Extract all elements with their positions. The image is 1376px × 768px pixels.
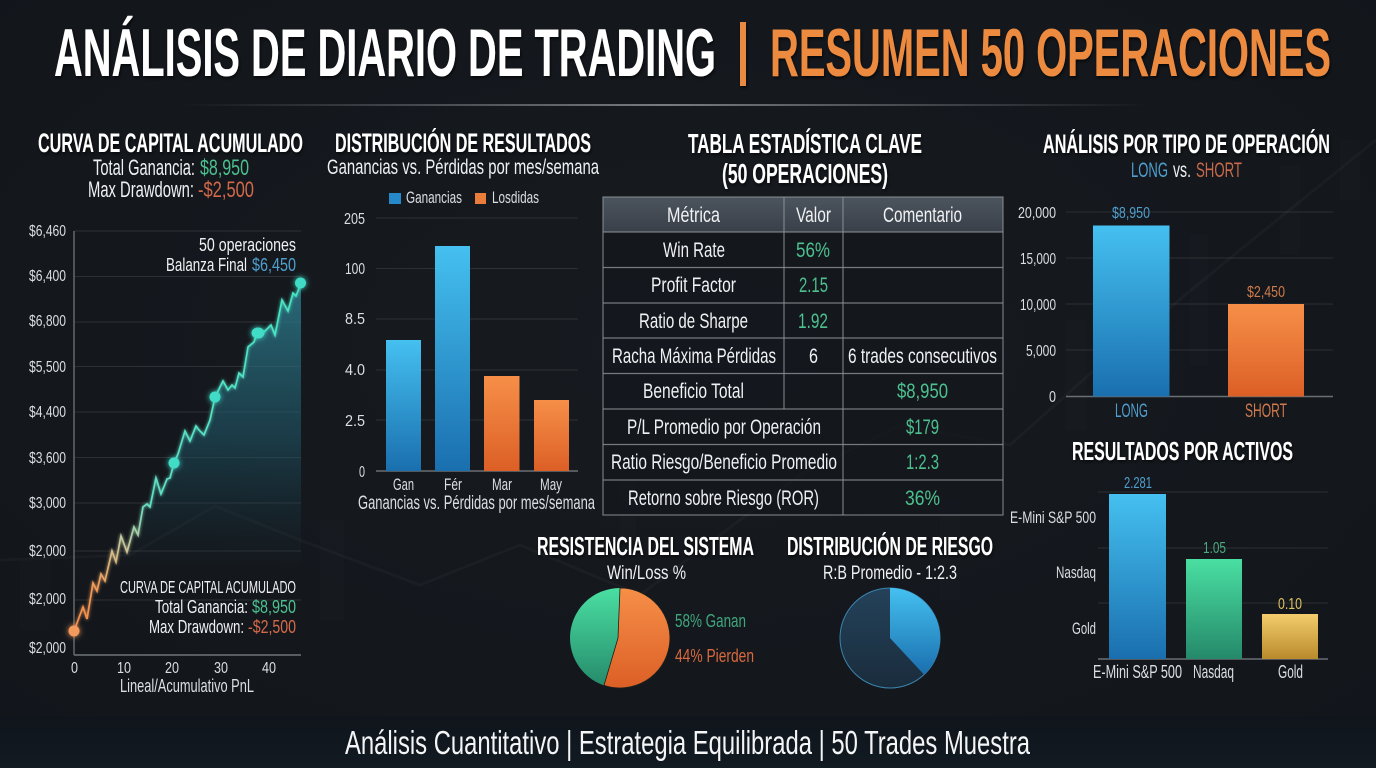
bar chart: gains vs losses: May (540, 476, 563, 494)
panel: statistics table (603, 128, 1003, 515)
pie labels: 44% Pierden (675, 646, 754, 666)
table: Beneficio Total (643, 379, 744, 403)
legend: Losdidas (492, 189, 539, 207)
x axis labels: 10 (117, 660, 131, 677)
bar chart: assets: 2.281 (1124, 475, 1152, 492)
table: 36% (905, 486, 940, 510)
callout: final balance: 50 operaciones (199, 235, 296, 255)
bar chart: long vs short: 0 (1049, 389, 1056, 406)
callout: chart summary (120, 577, 296, 637)
subheading: win loss: Win/Loss % (607, 563, 686, 584)
bar chart: long vs short: SHORT (1245, 401, 1287, 422)
x axis labels: 40 (262, 660, 276, 677)
x axis labels: 0 (71, 660, 78, 677)
y axis labels: $4,400 (29, 404, 66, 421)
bar chart: long vs short: LONG (1115, 401, 1148, 422)
table: Ratio Riesgo/Beneficio Promedio (611, 450, 837, 474)
table: Ratio de Sharpe (639, 309, 748, 333)
bar chart: long vs short: 10,000 (1020, 297, 1056, 314)
bar chart: assets: Gold (1072, 619, 1096, 638)
pie chart: risk (840, 588, 940, 688)
bar chart: gains vs losses: 205 (344, 211, 365, 228)
capital curve summary: -$2,500 (198, 177, 254, 202)
subheading: results distribution: Ganancias vs. Pérdidas por mes/semana (327, 156, 599, 179)
callout: chart summary: $8,950 (252, 597, 296, 617)
bar chart: assets: Nasdaq (1056, 563, 1096, 582)
heading: results distribution: DISTRIBUCIÓN DE RESULTADOS (335, 127, 591, 158)
x axis labels: 20 (165, 660, 179, 677)
callout: chart summary: Total Ganancia: (155, 597, 248, 617)
capital curve summary (88, 155, 254, 202)
panel: asset results (1010, 436, 1328, 682)
y axis labels: $6,400 (29, 268, 66, 285)
y axis labels: $6,460 (29, 223, 66, 240)
table: 1.92 (798, 309, 828, 333)
table: P/L Promedio por Operación (627, 415, 821, 439)
table: $8,950 (897, 379, 948, 403)
bar chart: long vs short (1018, 205, 1333, 422)
bar chart: gains vs losses: Fér (444, 476, 462, 494)
table: Comentario (883, 203, 962, 227)
bar chart: assets: E-Mini S&P 500 (1093, 662, 1182, 682)
pie labels (675, 611, 754, 666)
bar chart: gains vs losses: Gan (393, 476, 414, 494)
callout: chart summary: CURVA DE CAPITAL ACUMULADO (120, 577, 296, 597)
subheading: risk ratio: R:B Promedio - 1:2.3 (823, 563, 957, 584)
line chart: capital curve (29, 223, 306, 696)
bar chart: assets (1010, 475, 1328, 682)
heading: statistics table (688, 128, 922, 189)
footer (0, 716, 1376, 768)
table: $179 (906, 415, 939, 439)
panel: results distribution (327, 127, 599, 514)
subheading: long vs short: LONG (1131, 159, 1168, 182)
bar chart: long vs short: 15,000 (1020, 251, 1056, 268)
x axis labels: Lineal/Acumulativo PnL (120, 676, 254, 696)
x axis labels: 30 (214, 660, 228, 677)
panel: risk distribution (787, 531, 993, 688)
bar chart: long vs short: 20,000 (1018, 205, 1056, 222)
heading: capital curve: CURVA DE CAPITAL ACUMULADO (38, 128, 303, 158)
footer: Análisis Cuantitativo | Estrategia Equilibrada | 50 Trades Muestra (345, 724, 1030, 761)
bar chart: long vs short: $2,450 (1247, 284, 1285, 301)
callout: final balance: $6,450 (252, 255, 296, 275)
pie labels: 58% Ganan (675, 611, 746, 631)
bar chart: gains vs losses: 100 (345, 261, 365, 278)
y axis labels: $2,000 (29, 591, 66, 608)
capital curve summary: $8,950 (200, 155, 249, 180)
panel: capital curve (29, 128, 306, 696)
y axis labels: $2,000 (29, 543, 66, 560)
bar chart: gains vs losses: Ganancias vs. Pérdidas por mes/semana (358, 493, 595, 514)
bar chart: long vs short: 5,000 (1026, 343, 1056, 360)
y axis labels: $3,600 (29, 450, 66, 467)
panel: long vs short (1018, 128, 1333, 422)
heading: statistics table: TABLA ESTADÍSTICA CLAVE (688, 128, 922, 159)
x axis labels (71, 660, 276, 696)
subheading: long vs short: vs. (1173, 159, 1191, 182)
legend: Ganancias (406, 189, 462, 207)
table: Métrica (667, 203, 720, 227)
y axis labels: $6,800 (29, 313, 66, 330)
table: Retorno sobre Riesgo (ROR) (628, 486, 819, 510)
table: Win Rate (663, 238, 725, 262)
bar chart: gains vs losses: 8.5 (345, 311, 365, 328)
y axis labels: $5,500 (29, 359, 66, 376)
heading: statistics table: (50 OPERACIONES) (722, 158, 888, 189)
capital curve summary: Total Ganancia: (93, 155, 195, 180)
subheading: long vs short (1131, 159, 1242, 182)
bar chart: gains vs losses: 2.5 (345, 413, 365, 430)
table: Racha Máxima Pérdidas (612, 344, 776, 368)
legend (389, 189, 539, 207)
table: 56% (796, 238, 830, 262)
table: Valor (796, 203, 831, 227)
table: 6 (809, 344, 818, 368)
callout: final balance (166, 235, 296, 275)
pie chart: win loss (570, 588, 670, 688)
y axis labels (29, 223, 66, 657)
bar chart: assets: E-Mini S&P 500 (1010, 508, 1096, 527)
callout: chart summary: Max Drawdown: (149, 617, 244, 637)
bar chart: assets: 1.05 (1203, 540, 1226, 557)
table: 6 trades consecutivos (848, 344, 997, 368)
capital curve summary: Max Drawdown: (88, 177, 194, 202)
table: 2.15 (799, 273, 828, 297)
bar chart: gains vs losses (344, 211, 595, 514)
heading: risk distribution: DISTRIBUCIÓN DE RIESGO (787, 531, 993, 561)
bar chart: gains vs losses: Mar (492, 476, 512, 494)
bar chart: gains vs losses: 0 (359, 464, 365, 481)
bar chart: assets: Nasdaq (1193, 662, 1234, 682)
y axis labels: $3,000 (29, 495, 66, 512)
table: Profit Factor (651, 273, 736, 297)
callout: chart summary: -$2,500 (248, 617, 296, 637)
panel: system resilience (537, 531, 754, 688)
bar chart: long vs short: $8,950 (1112, 205, 1150, 222)
bar chart: assets: 0.10 (1278, 596, 1302, 613)
bar chart: assets: Gold (1278, 662, 1303, 682)
table: 1:2.3 (906, 450, 939, 474)
table (603, 197, 1003, 515)
title: ANÁLISIS DE DIARIO DE TRADING (54, 15, 716, 91)
subheading: long vs short: SHORT (1196, 159, 1242, 182)
heading: system resilience: RESISTENCIA DEL SISTEMA (537, 531, 754, 561)
bar chart: gains vs losses: 4.0 (345, 362, 365, 379)
callout: final balance: Balanza Final (166, 255, 247, 275)
y axis labels: $2,000 (29, 640, 66, 657)
